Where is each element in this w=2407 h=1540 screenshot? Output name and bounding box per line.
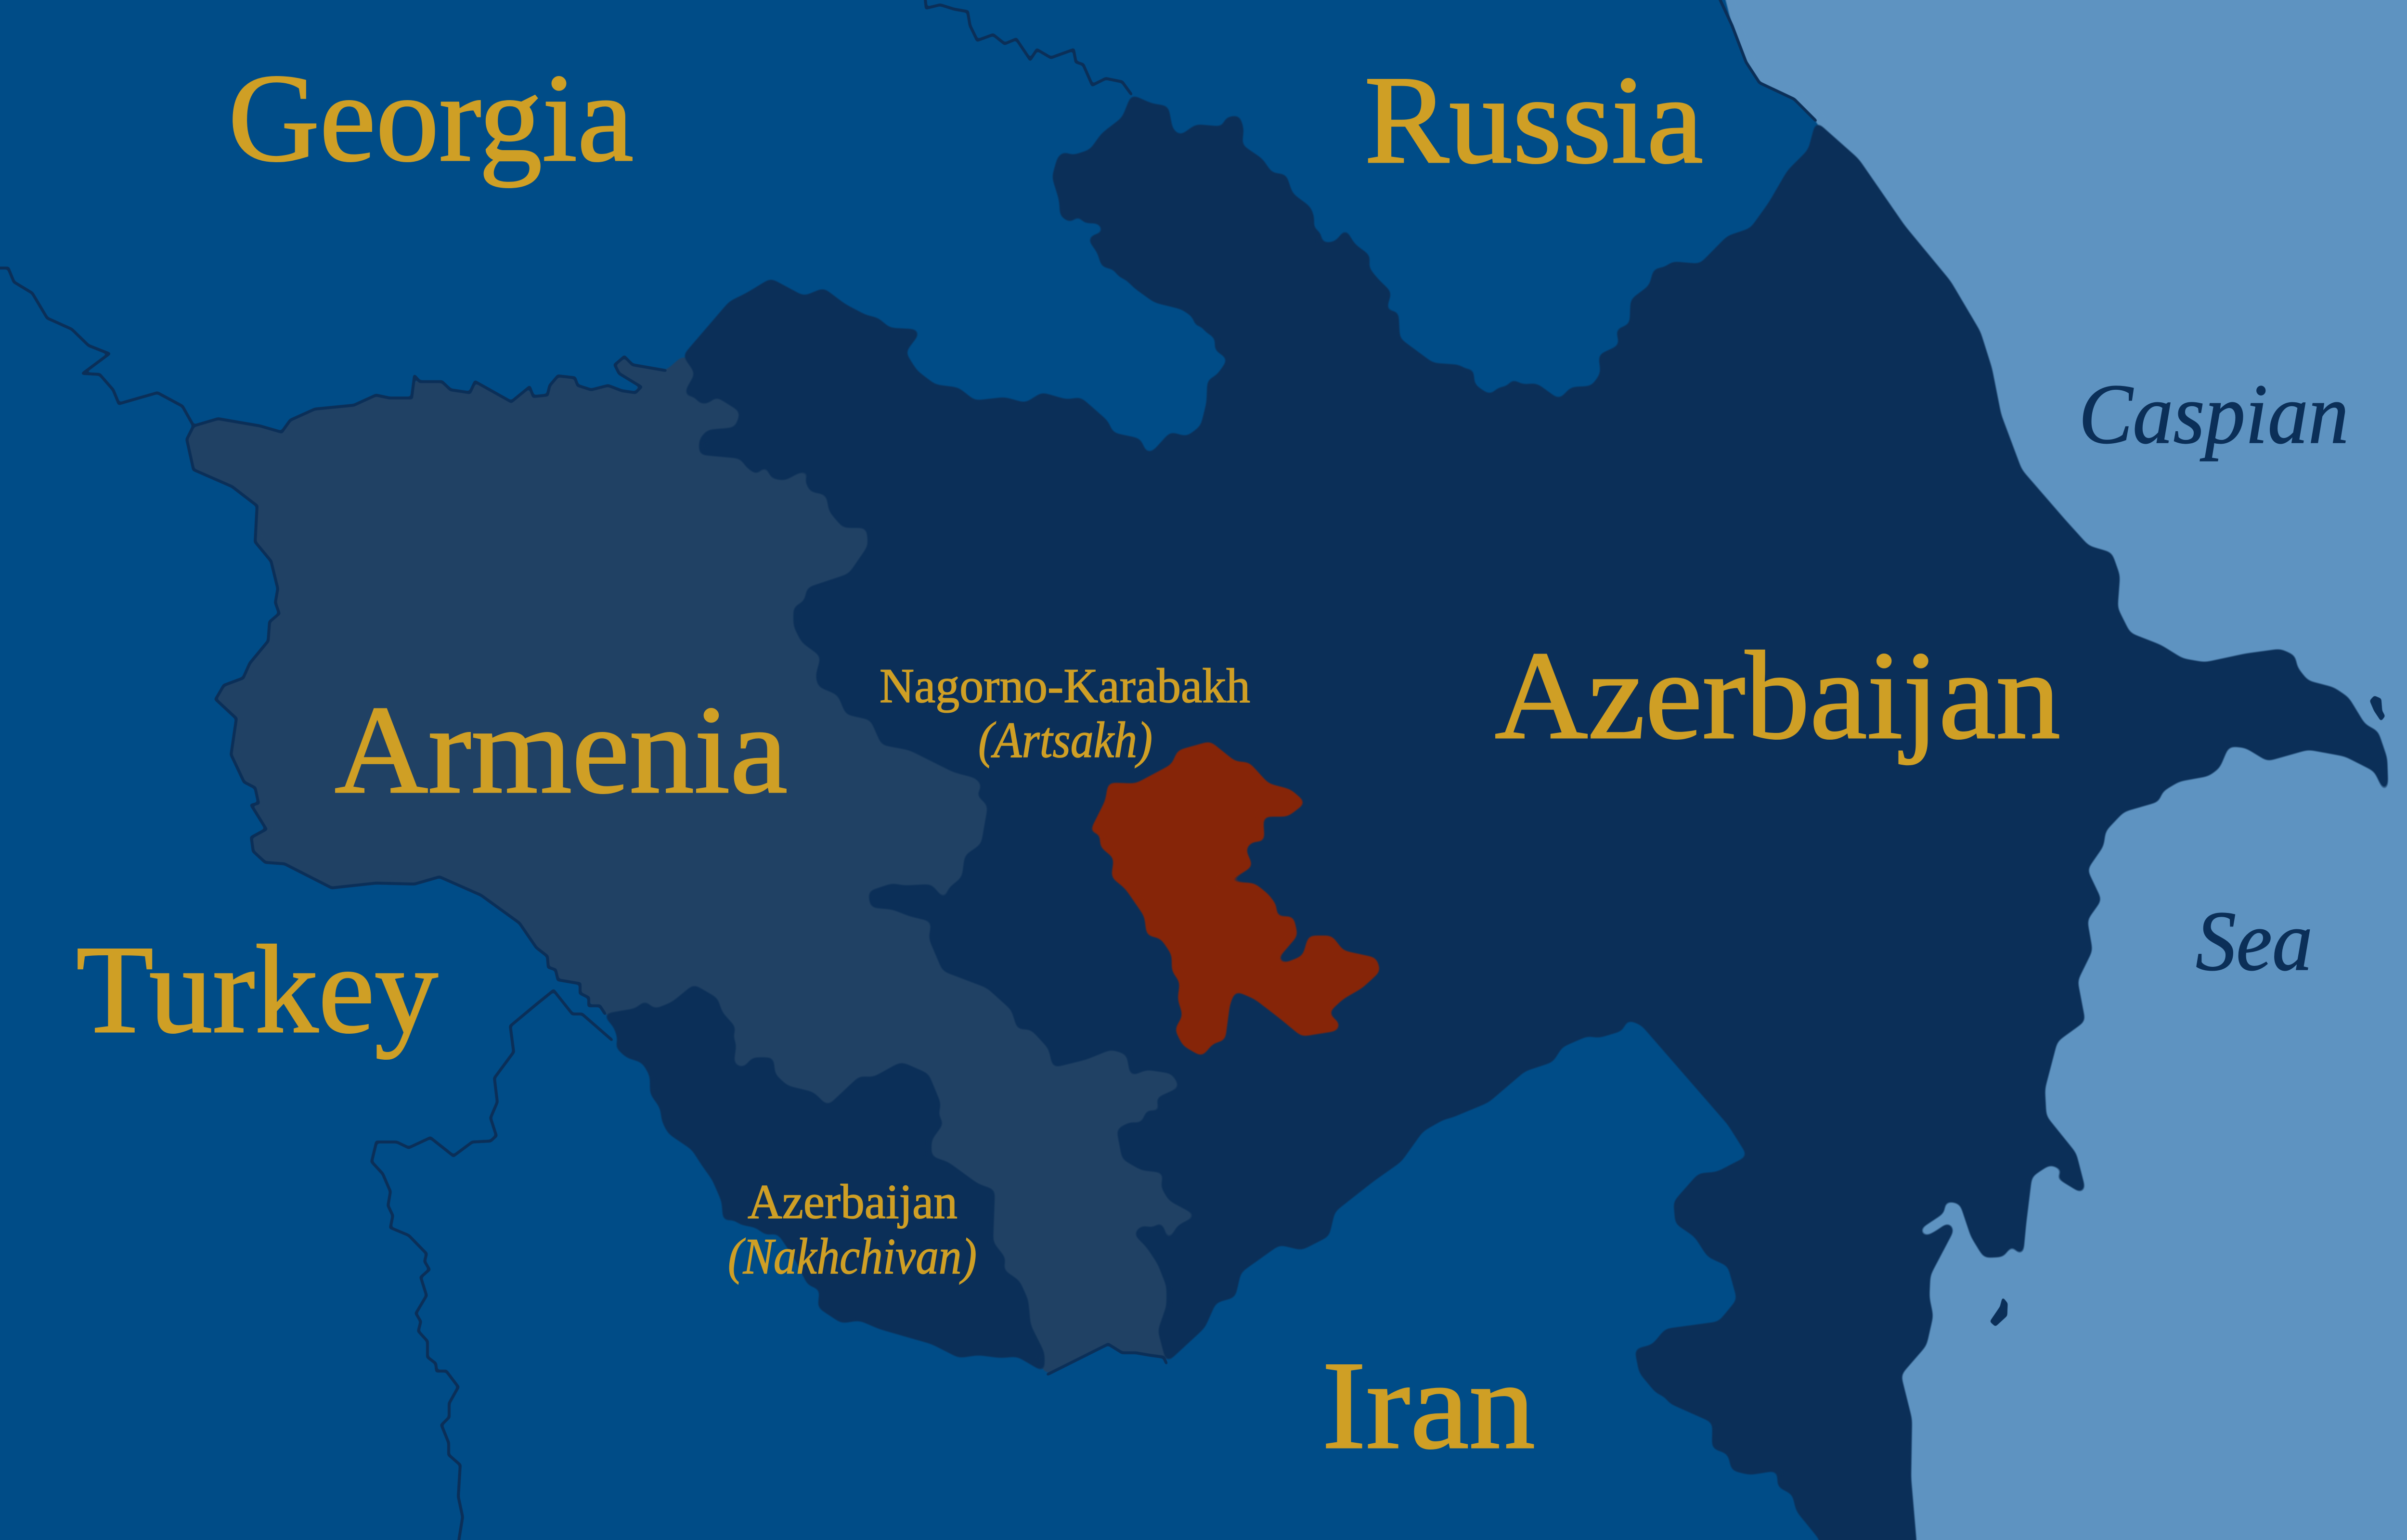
label: Nagorno-Karabakh: Nagorno-Karabakh xyxy=(880,659,1250,713)
label: Sea: Sea xyxy=(2196,893,2313,988)
label: Azerbaijan: Azerbaijan xyxy=(1495,626,2060,765)
label: Caspian: Caspian xyxy=(2079,366,2349,462)
international border lines xyxy=(0,0,1816,1540)
Azerbaijan: small Caspian islands xyxy=(1990,696,2385,1326)
label: Artsakh: (Artsakh) xyxy=(978,712,1152,768)
label: Russia: Russia xyxy=(1364,50,1703,190)
label: Armenia: Armenia xyxy=(335,680,788,820)
Armenia territory xyxy=(187,356,1204,1374)
Nagorno-Karabakh territory xyxy=(1089,741,1381,1057)
Azerbaijan: Nakhchivan exclave xyxy=(602,984,1048,1374)
Caspian Sea water xyxy=(1716,0,2407,1540)
label: Iran: Iran xyxy=(1322,1335,1535,1475)
label: Georgia: Georgia xyxy=(228,48,634,188)
label: Nakhchivan: (Nakhchivan) xyxy=(728,1228,977,1284)
Azerbaijan main territory xyxy=(683,94,2388,1540)
label: Turkey: Turkey xyxy=(76,920,438,1059)
label: Azerbaijan exclave: Azerbaijan xyxy=(748,1175,958,1229)
